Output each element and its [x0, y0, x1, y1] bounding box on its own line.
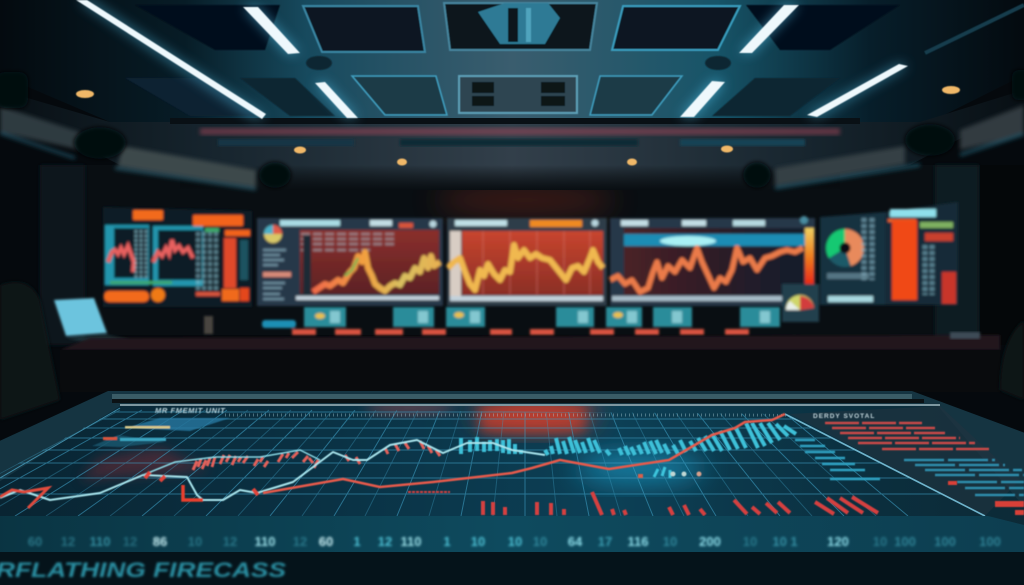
recessed downlights	[76, 86, 960, 166]
number strip: 60	[319, 534, 333, 549]
number strip: 120	[827, 534, 849, 549]
number strip: 12	[223, 534, 237, 549]
side soffits and speakers	[0, 70, 1024, 189]
forecast screen	[0, 398, 1024, 530]
number strip: 200	[699, 534, 721, 549]
monitor 2: red line chart	[257, 218, 443, 306]
monitor 1: dual charts	[103, 207, 252, 307]
number strip: 10	[663, 534, 677, 549]
number strip: 86	[153, 534, 167, 549]
right red data table	[825, 423, 989, 449]
monitor 6: order book	[885, 202, 958, 305]
forecast red line	[263, 414, 785, 493]
number strip: 17	[598, 534, 612, 549]
lower ceiling band	[0, 90, 1024, 190]
ceiling	[0, 0, 1024, 190]
number strip: 12	[378, 534, 392, 549]
number strip: 10	[471, 534, 485, 549]
left laptop	[54, 298, 130, 343]
number strip: 10	[508, 534, 522, 549]
red markers row	[408, 492, 878, 515]
chart border	[0, 408, 985, 516]
forecast white line with candles	[0, 440, 545, 508]
monitor 5: donut panel	[820, 212, 885, 305]
chart grid	[0, 410, 960, 516]
number strip: 1	[353, 534, 361, 549]
blue volume bars	[461, 423, 796, 455]
monitor 3: bright red line chart	[447, 218, 607, 306]
table heading left: MR FMEMIT UNIT	[155, 406, 226, 415]
gauge tile	[782, 284, 819, 322]
number strip: 10	[188, 534, 202, 549]
number strip: 100	[979, 534, 1001, 549]
blue data rows in chart	[795, 440, 880, 479]
number strip: 60	[28, 534, 42, 549]
chairs	[0, 282, 1024, 420]
foreground table	[0, 391, 1024, 585]
footer caption: RFLATHING FIRECASS	[0, 559, 286, 582]
number strip: 10	[533, 534, 547, 549]
ceiling light strips	[76, 0, 908, 119]
number strip: 116	[628, 534, 648, 549]
number strip: 10	[743, 534, 757, 549]
number strip: 100	[894, 534, 916, 549]
console desk	[60, 332, 1000, 392]
number strip: 110	[90, 534, 110, 549]
number strip: 110	[401, 534, 421, 549]
number strip: 64	[568, 534, 583, 549]
ceiling panels	[125, 3, 1024, 116]
number strip: 100	[934, 534, 956, 549]
desk laptops and keyboards	[204, 307, 780, 335]
info panels top-left	[92, 418, 230, 447]
cyan dots	[638, 467, 702, 478]
table heading right: DERDY SVOTAL	[813, 413, 875, 420]
number strip: 110	[255, 534, 275, 549]
right red accents	[948, 481, 1024, 515]
number strip: 10 1	[772, 534, 798, 549]
number strip: 10	[873, 534, 887, 549]
table front edge	[0, 552, 1024, 585]
number strip: 12	[123, 534, 137, 549]
number strip: 12	[293, 534, 307, 549]
number strip	[0, 516, 1024, 552]
monitor 4: cyan band chart with heat bar	[610, 216, 815, 306]
right blue data table	[904, 460, 1024, 495]
number strip: 12	[61, 534, 75, 549]
wall monitors	[103, 202, 958, 322]
number strip: 1	[443, 534, 451, 549]
